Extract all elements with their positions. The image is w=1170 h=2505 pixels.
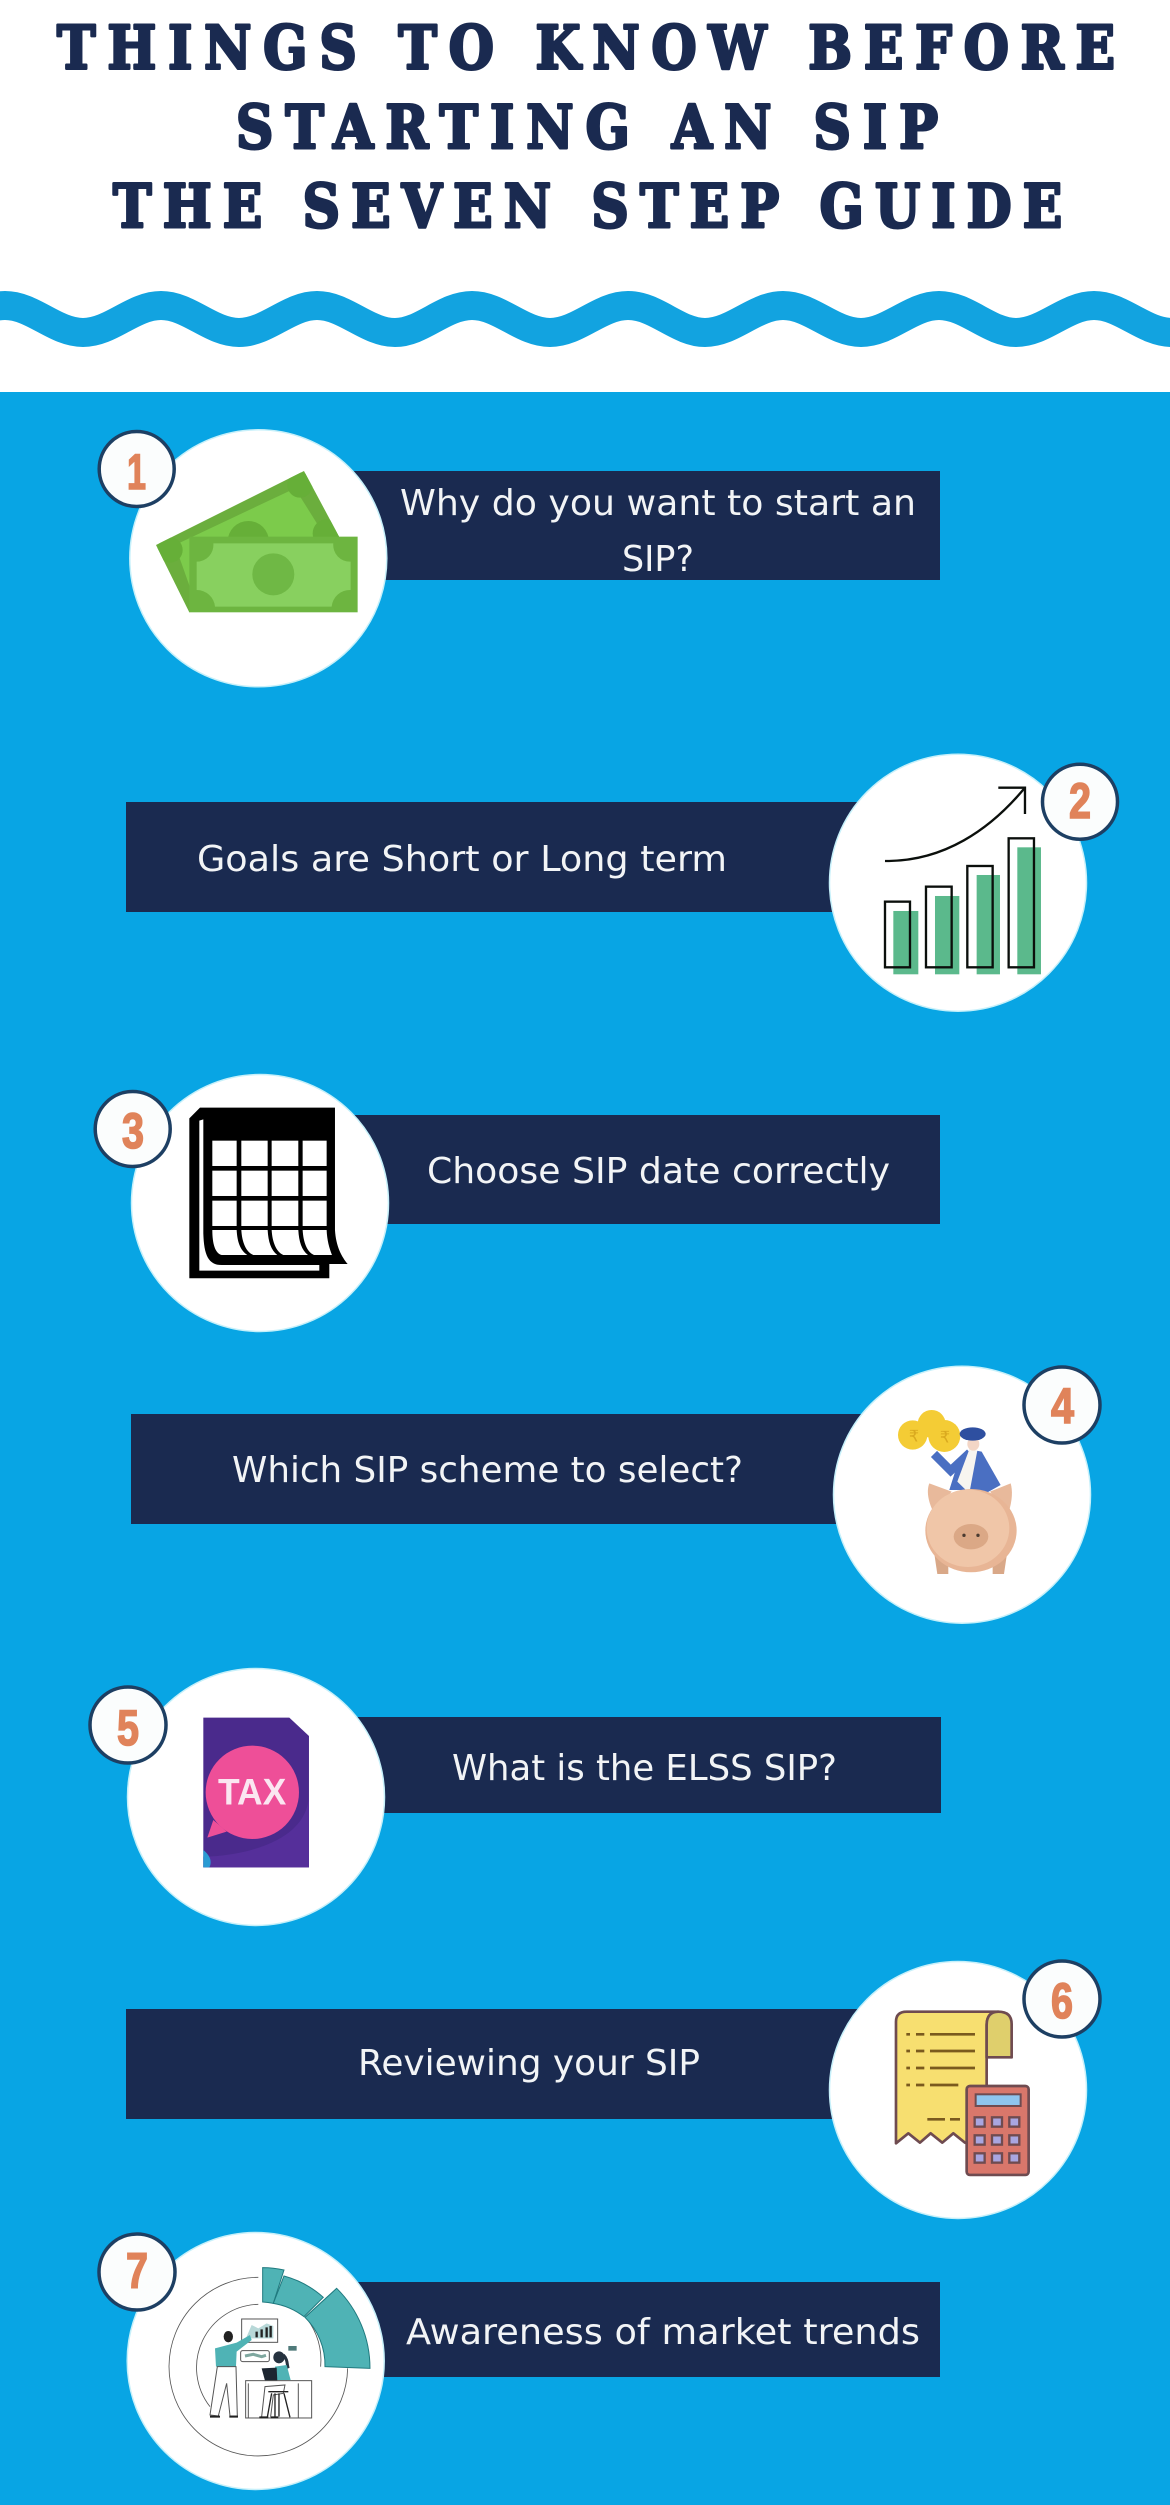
icon: market trends analysts [169,2268,370,2456]
icon: calendar [189,1108,348,1278]
step 1 text [400,483,916,580]
step 1 label bar [258,471,940,580]
icon: growth bar chart [885,788,1041,974]
icon: tax document: TAX [218,1772,287,1813]
icon: piggy bank with coins: ₹ [909,1427,919,1446]
step 3 number badge [95,1092,170,1166]
step 3 text: Choose SIP date correctly [427,1151,890,1192]
step 4 number badge [1024,1367,1100,1443]
step 1 number badge [99,432,174,506]
step 6 label bar [126,2009,958,2119]
title [57,14,1115,242]
step 5 circle [128,1668,384,1926]
step 3 [95,1074,940,1332]
title: THE SEVEN STEP GUIDE [113,173,1062,242]
step 5 label bar [256,1717,941,1813]
step 1 text: SIP? [622,539,694,580]
step 2 number badge [1042,764,1118,839]
step 3 circle [132,1074,388,1332]
icon: piggy bank with coins: ₹ [940,1428,950,1447]
step 7 number badge [99,2234,175,2310]
icon: receipt and calculator [896,2012,1029,2175]
step 3 label bar [260,1115,940,1224]
step 4 circle [834,1366,1090,1623]
step 2 [126,754,1118,1011]
step 1 circle [130,430,387,687]
title: THINGS TO KNOW BEFORE [57,14,1115,83]
title: STARTING AN SIP [236,94,938,163]
step 1 number badge: 1 [127,444,146,500]
step 4 [131,1366,1100,1623]
step 4 text: Which SIP scheme to select? [232,1450,743,1491]
step 6 circle [830,1962,1086,2218]
step 2 label bar [126,802,958,912]
step 2 text: Goals are Short or Long term [197,839,727,880]
step 6 [126,1961,1100,2218]
step 6 number badge [1024,1961,1100,2037]
step 2 circle [830,754,1086,1011]
step 6 text: Reviewing your SIP [358,2043,700,2084]
step 5 number badge: 5 [117,1700,139,1756]
step 5 number badge [90,1687,166,1763]
icon: banknotes [153,468,358,615]
step 4 label bar [131,1414,962,1524]
step 6 number badge: 6 [1051,1973,1073,2029]
step 2 number badge: 2 [1069,773,1091,829]
icon: tax document [203,1718,309,1867]
step 7 number badge: 7 [126,2243,148,2299]
step 1 [99,430,940,687]
step 5 text: What is the ELSS SIP? [452,1748,837,1789]
step 3 number badge: 3 [122,1103,144,1159]
step 7 circle [127,2232,384,2490]
wave band [0,306,1170,332]
step 7 [99,2232,940,2490]
step 7 text: Awareness of market trends [406,2312,920,2353]
step 4 number badge: 4 [1051,1378,1074,1434]
step 5 [90,1668,941,1926]
step 1 text: Why do you want to start an [400,483,916,524]
step 7 label bar [256,2282,940,2377]
icon: piggy bank with coins [898,1410,1017,1574]
